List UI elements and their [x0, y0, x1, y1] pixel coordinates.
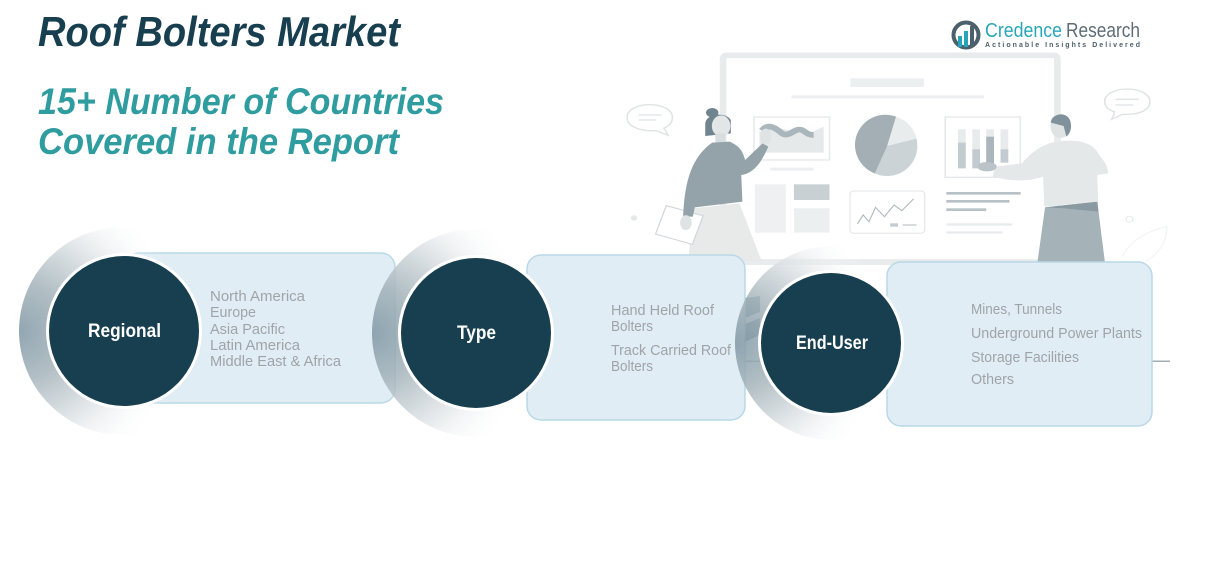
area chart — [754, 117, 829, 160]
panel: end-user — [887, 262, 1152, 426]
regional list: North America — [210, 288, 306, 305]
speech bubble right — [1105, 89, 1150, 119]
end-user list: Underground Power Plants — [971, 325, 1142, 342]
regional list: Asia Pacific — [210, 321, 285, 338]
woman presenter — [656, 108, 771, 263]
type list: Track Carried Roof — [611, 342, 732, 359]
logo: Credence Research: Credence — [985, 20, 1062, 42]
monitor base and floor line — [745, 261, 1170, 362]
subtitle — [38, 81, 444, 162]
end-user list — [971, 301, 1142, 388]
circle: type: Type — [457, 323, 496, 344]
type list — [611, 302, 732, 375]
logo: Credence Research: Actionable Insights Delivered — [985, 42, 1140, 49]
man presenter — [977, 114, 1108, 263]
circle: end-user: End-User — [796, 333, 869, 354]
type list: Bolters — [611, 318, 653, 335]
panel: regional — [125, 253, 395, 403]
bar chart — [945, 117, 1020, 177]
circle: regional — [19, 227, 227, 435]
monitor — [723, 55, 1057, 262]
end-user list: Storage Facilities — [971, 349, 1079, 366]
logo: Credence Research: Research — [1066, 20, 1140, 42]
dashboard blocks — [755, 168, 829, 233]
logo: Credence Research — [954, 20, 1140, 49]
type list: Bolters — [611, 358, 653, 375]
text lines — [946, 192, 1021, 234]
line chart — [850, 191, 925, 233]
logo icon — [954, 22, 978, 48]
circle: type — [372, 229, 580, 437]
end-user list: Mines, Tunnels — [971, 301, 1062, 318]
panel: type — [527, 255, 745, 420]
illustration: presenters with dashboard — [627, 55, 1167, 263]
circle: regional: Regional — [88, 321, 161, 342]
regional list: Latin America — [210, 337, 301, 354]
circle: end-user — [735, 246, 929, 440]
regional list: Europe — [210, 304, 256, 321]
decorative dots — [631, 215, 1133, 222]
end-user list: Others — [971, 371, 1014, 388]
plant outline — [1122, 227, 1167, 263]
pie chart — [855, 115, 917, 176]
speech bubble left — [627, 105, 672, 135]
type list: Hand Held Roof — [611, 302, 715, 319]
subtitle: 15+ Number of Countries — [38, 81, 444, 122]
regional list: Middle East & Africa — [210, 353, 342, 370]
subtitle: Covered in the Report — [38, 121, 401, 162]
title: Roof Bolters Market — [38, 8, 402, 55]
regional list — [210, 288, 342, 370]
